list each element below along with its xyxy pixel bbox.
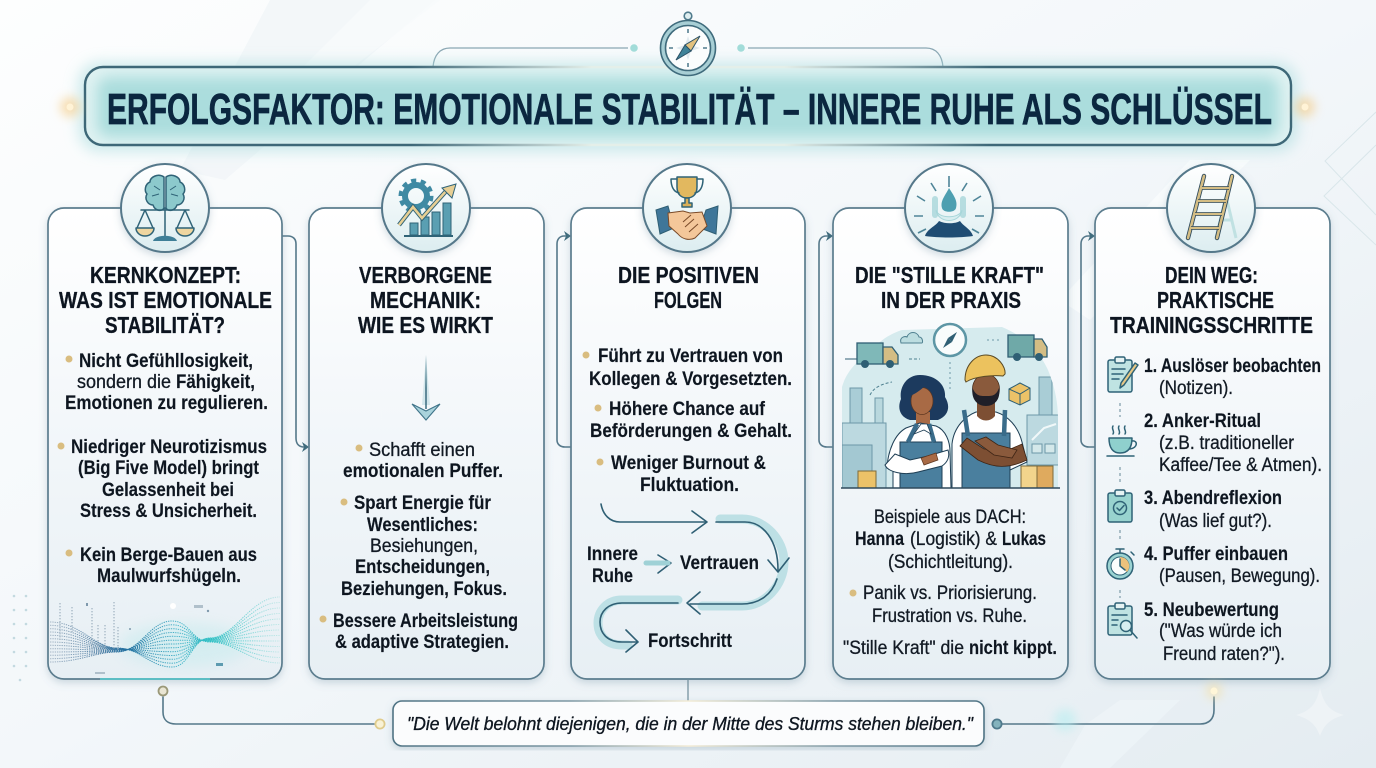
heading [358, 262, 494, 338]
step 4: 4. Puffer einbauen [1144, 544, 1288, 565]
panel: Kernkonzept [48, 208, 282, 679]
panel: Die positiven Folgen [571, 208, 805, 679]
heading: IN DER PRAXIS [881, 287, 1021, 313]
bullet: Vertrauen: Kollegen & Vorgesetzten. [589, 369, 792, 390]
bullet: Kein Berge-Bauen: Maulwurfshügeln. [97, 566, 241, 587]
bullet: Beförderungen [590, 399, 792, 442]
bullet: Spart Energie: Beziehungen, Fokus. [341, 579, 507, 600]
heading [1110, 262, 1313, 338]
heading: WAS IST EMOTIONALE [59, 287, 272, 313]
step 3: 3. Abendreflexion [1144, 488, 1282, 509]
bullet: Bessere Arbeitsleistung: & adaptive Strategien. [335, 632, 509, 653]
panel: Dein Weg [1095, 208, 1330, 679]
panel: Stille Kraft [833, 208, 1068, 679]
bullet: Panik vs. Priorisierung [850, 583, 1037, 627]
bullet: Spart Energie: Besiehungen, [370, 536, 478, 557]
icon: trophy and handshake [643, 164, 731, 252]
icon: ladder [1167, 164, 1255, 252]
bullet: Spart Energie [340, 493, 507, 600]
text: nicht kippt: "Stille Kraft" die [843, 638, 964, 659]
bullet: Niedriger Neurotizismus: Niedriger Neurotizismus [71, 437, 267, 458]
heading: WIE ES WIRKT [358, 312, 494, 338]
top connector lines [433, 44, 943, 67]
flow diagram: Fortschritt [648, 631, 733, 652]
step 3 [1108, 488, 1282, 532]
step 4: (Pausen, Bewegung). [1159, 566, 1320, 587]
arrow: card 2 to card 3 [557, 231, 571, 447]
heading: PRAKTISCHE [1157, 287, 1274, 313]
icon: gear and rising chart [382, 164, 470, 252]
icon: compass [660, 12, 716, 75]
bullet: Nicht Gefühllosigkeit: Emotionen zu regulieren. [65, 393, 268, 414]
step 2 [1107, 411, 1322, 476]
heading: KERNKONZEPT: [90, 262, 241, 288]
text: nicht kippt: nicht kippt. [969, 638, 1057, 659]
arrow: card 4 to card 5 [1081, 231, 1095, 447]
text: nicht kippt [843, 638, 1057, 659]
bullet: Burnout: Weniger Burnout & [611, 453, 766, 474]
heading [618, 262, 759, 313]
callout: quote [393, 701, 984, 746]
person: Hanna [885, 375, 951, 488]
heading [855, 262, 1044, 313]
step 5 [1108, 600, 1285, 665]
icon: brain and scales [121, 164, 209, 252]
arrow: card 3 to card 4 [819, 231, 833, 447]
heading: DIE POSITIVEN [618, 262, 759, 288]
heading [59, 262, 272, 338]
bullet: Burnout [596, 453, 766, 496]
heading: DIE "STILLE KRAFT" [855, 262, 1044, 288]
bullet: Bessere Arbeitsleistung: Bessere Arbeitsleistung [333, 611, 518, 632]
flow diagram: Ruhe [592, 566, 633, 587]
bullet: Niedriger Neurotizismus: (Big Five Model) bringt [78, 458, 260, 479]
bullet: Panik vs. Priorisierung: Panik vs. Priorisierung. [863, 583, 1037, 604]
decorative glow dots [60, 97, 1315, 117]
heading: STABILITÄT? [105, 312, 225, 338]
text: Beispiele: Lukas [1002, 529, 1046, 550]
step 4 [1107, 544, 1320, 587]
flow diagram: Vertrauen [680, 553, 759, 574]
bullet: Schafft einen [343, 440, 503, 482]
bullet: Schafft einen: emotionalen Puffer. [343, 461, 503, 482]
bullet: Spart Energie: Entscheidungen, [355, 557, 490, 578]
bullet: Kein Berge-Bauen: Kein Berge-Bauen aus [80, 545, 257, 566]
step 1 [1108, 356, 1321, 399]
person: Lukas [952, 355, 1027, 488]
arrow: card 1 to card 2 [282, 236, 309, 452]
step 1: (Notizen). [1159, 378, 1233, 399]
bullet: Nicht Gefühllosigkeit: sondern die [77, 372, 171, 393]
flow diagram [587, 504, 789, 652]
illustration: workers and logistics [841, 324, 1060, 488]
panel: Verborgene Mechanik [309, 208, 544, 679]
bullet: Niedriger Neurotizismus [58, 437, 267, 522]
dashed step connectors [1119, 403, 1121, 598]
step 2: 2. Anker-Ritual [1144, 411, 1261, 432]
text: Beispiele [855, 507, 1046, 573]
heading: VERBORGENE [359, 262, 492, 288]
bottom connectors [158, 679, 1222, 731]
arrow: down [412, 355, 440, 420]
bullet: Vertrauen [582, 346, 792, 390]
bullet: Nicht Gefühllosigkeit: Fähigkeit, [176, 372, 255, 393]
step 3: (Was lief gut?). [1159, 511, 1272, 532]
bullet: Nicht Gefühllosigkeit: Nicht Gefühllosigkeit, [79, 351, 253, 372]
bullet: Kein Berge-Bauen [66, 545, 257, 587]
bullet: Spart Energie: Spart Energie für [354, 493, 492, 514]
icon: calm flame [905, 164, 993, 252]
step 1: 1. Auslöser beobachten [1144, 356, 1321, 377]
step 5: ("Was würde ich [1159, 621, 1282, 642]
heading: DEIN WEG: [1165, 262, 1258, 288]
heading: TRAININGSSCHRITTE [1110, 312, 1313, 338]
title banner [78, 62, 1298, 152]
step 5: Freund raten?"). [1163, 644, 1285, 665]
bullet: Beförderungen: Beförderungen & Gehalt. [590, 421, 792, 442]
bullet: Beförderungen: Höhere Chance auf [609, 399, 766, 420]
bullet: Niedriger Neurotizismus: Stress & Unsicherheit. [80, 501, 257, 522]
bullet: Panik vs. Priorisierung: Frustration vs. Ruhe. [872, 606, 1027, 627]
step 2: (z.B. traditioneller [1159, 433, 1295, 454]
text: Beispiele: (Logistik) & [910, 529, 997, 550]
bullet: Schafft einen: Schafft einen [369, 440, 475, 461]
text: Beispiele: (Schichtleitung). [888, 552, 1013, 573]
heading: FOLGEN [654, 287, 722, 313]
bullet: Spart Energie: Wesentliches: [367, 515, 478, 536]
callout: quote: "Die Welt belohnt diejenigen, die in der Mitte des Sturms stehen bleiben." [407, 713, 974, 734]
bullet: Nicht Gefühllosigkeit [65, 351, 268, 414]
text: Beispiele: Hanna [855, 529, 904, 550]
text: Beispiele: Beispiele aus DACH: [874, 507, 1026, 528]
bullet: Bessere Arbeitsleistung [320, 611, 518, 653]
step 2: Kaffee/Tee & Atmen). [1159, 455, 1322, 476]
step 5: 5. Neubewertung [1144, 600, 1279, 621]
flow diagram: Innere [587, 544, 638, 565]
wave graphic [50, 597, 280, 679]
bullet: Burnout: Fluktuation. [640, 475, 739, 496]
bullet: Niedriger Neurotizismus: Gelassenheit bei [102, 480, 234, 501]
heading: MECHANIK: [370, 287, 481, 313]
bullet: Vertrauen: Führt zu Vertrauen von [598, 346, 783, 367]
